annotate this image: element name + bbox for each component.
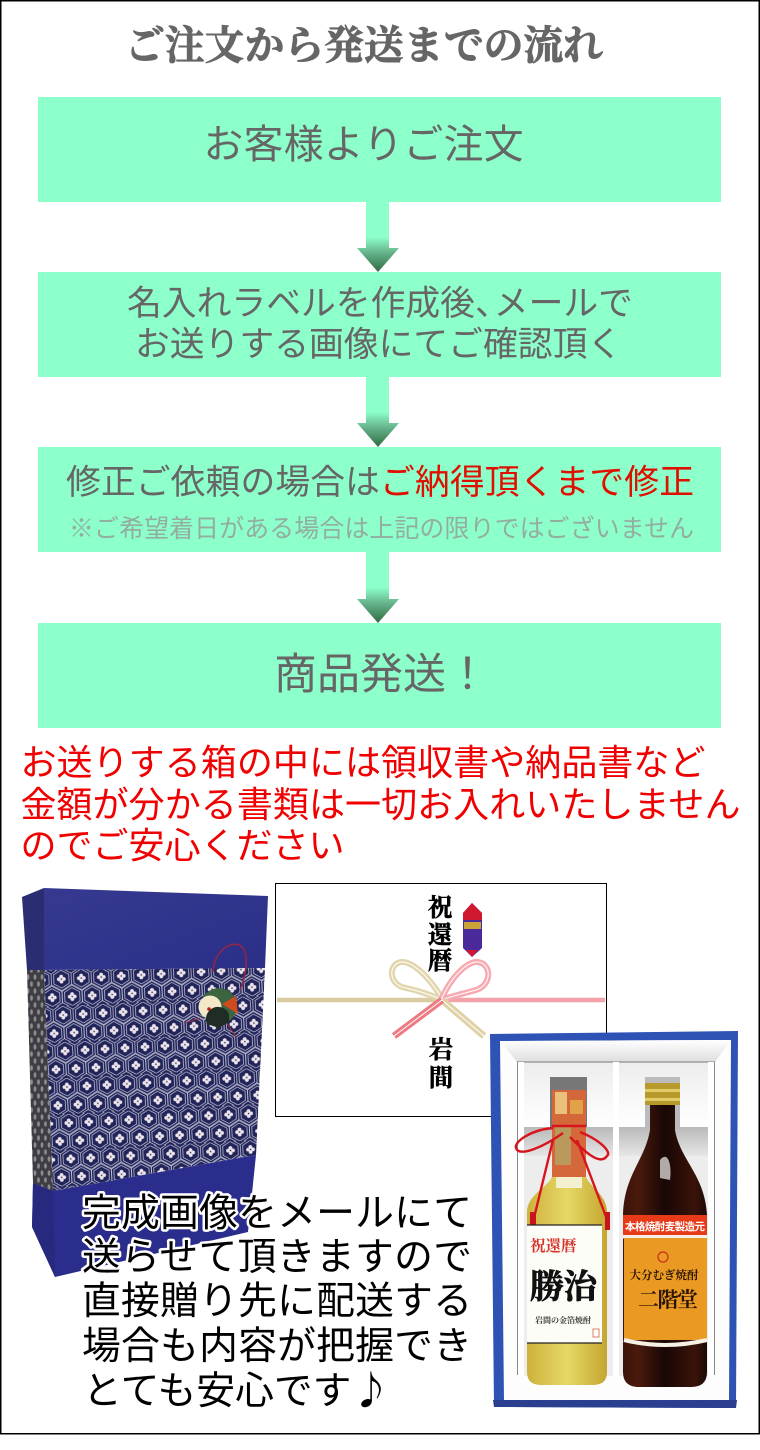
step 4: shipment [38, 623, 721, 728]
caption text [82, 1192, 472, 1416]
caption text: 場合も内容が把握でき [82, 1325, 472, 1368]
tray panels [524, 1063, 613, 1127]
step 1: order [38, 97, 721, 202]
noshi text: 暦 [428, 947, 452, 975]
bottle: Nikaido [623, 1083, 707, 1387]
red notice text: のでご安心ください [20, 825, 344, 866]
noshi text: 岩 [429, 1036, 453, 1064]
step 4: shipment: 商品発送！ [274, 651, 489, 699]
bottle: gold leaf shochu [516, 1090, 610, 1385]
step 2: label proof: お送りする画像にてご確認頂く [135, 325, 622, 364]
step 1: order: お客様よりご注文 [204, 123, 524, 167]
caption text: とても安心です♪ [83, 1360, 390, 1416]
arrow 3 [357, 552, 399, 623]
red notice text: お送りする箱の中には領収書や納品書など [20, 742, 706, 783]
step 2: label proof [38, 272, 721, 377]
bottle: Nikaido: 本格焼酎麦製造元 [625, 1220, 706, 1233]
bottle: gold leaf shochu: 祝還暦 [530, 1236, 577, 1255]
caption text: 完成画像をメールにて [82, 1192, 472, 1235]
title: ご注文から発送までの流れ [125, 24, 603, 68]
noshi paper [276, 884, 606, 1116]
noshi text: 祝 [428, 894, 453, 922]
noshi text [428, 894, 453, 1092]
noshi text: 間 [429, 1064, 453, 1092]
step 3: corrections: 修正ご依頼の場合はご納得頂くまで修正 [66, 463, 694, 502]
caption text: 直接贈り先に配送する [82, 1280, 472, 1323]
step 3: corrections [38, 447, 721, 552]
caption text: 送らせて頂きますので [82, 1236, 472, 1279]
red notice text: 金額が分かる書類は一切お入れいたしません [20, 784, 740, 825]
bottle: Nikaido: 大分むぎ焼酎 [630, 1268, 699, 1282]
bottle: gold leaf shochu: 勝治 [530, 1269, 599, 1306]
noshi text: 還 [428, 921, 452, 949]
red notice text [20, 742, 740, 866]
noshi ornament [463, 903, 482, 957]
bottle: gold leaf shochu: 岩間の金箔焼酎 [535, 1315, 591, 1325]
arrow 2 [357, 377, 399, 447]
mizuhiki cord [277, 962, 605, 1036]
photo: blue patterned gift box [22, 888, 268, 1277]
step 3: corrections: ※ご希望着日がある場合は上記の限りではございません [69, 514, 694, 543]
photo: gift set with two bottles [490, 1031, 738, 1408]
arrow 1 [357, 202, 399, 272]
step 2: label proof: 名入れラベルを作成後、メールで [127, 284, 633, 323]
bottle: Nikaido: 二階堂 [638, 1288, 698, 1312]
